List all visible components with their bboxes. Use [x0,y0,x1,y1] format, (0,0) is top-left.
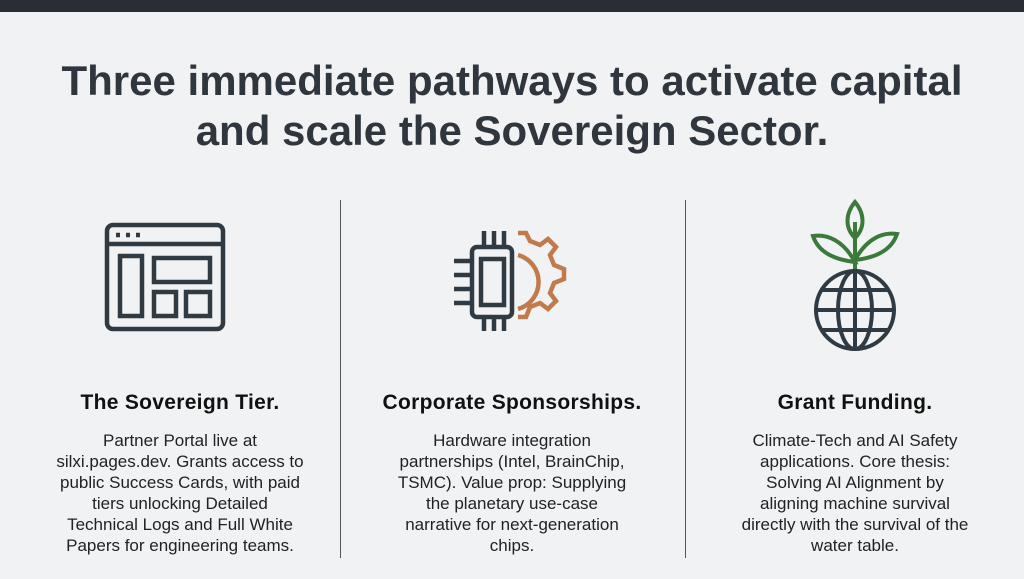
column: corporate sponsorships: narrative for next-generation [405,515,619,534]
column: corporate sponsorships: Corporate Sponsorships. [383,391,641,414]
column: corporate sponsorships: chips. [490,536,534,555]
column: grant funding: Climate-Tech and AI Safety [752,431,958,450]
column: sovereign tier: The Sovereign Tier. [80,391,280,414]
column: corporate sponsorships: partnerships (Intel, BrainChip, [400,452,624,471]
column: grant funding: applications. Core thesis: [760,452,950,471]
icon: chip and gear [454,230,566,331]
column: corporate sponsorships: TSMC). Value prop: Supplying [398,473,626,492]
column: grant funding [742,391,968,555]
column: sovereign tier: silxi.pages.dev. Grants access to [56,452,304,471]
column: sovereign tier: Technical Logs and Full White [67,515,293,534]
column: sovereign tier: public Success Cards, with paid [60,473,300,492]
column: sovereign tier: tiers unlocking Detailed [92,494,268,513]
title [62,57,962,154]
column: corporate sponsorships: Hardware integration [433,431,591,450]
icon: portal window [104,222,226,332]
column: sovereign tier [56,391,304,555]
column: sovereign tier: Partner Portal live at [103,431,257,450]
title: Three immediate pathways to activate capital [62,57,962,104]
column: grant funding: Grant Funding. [778,391,932,414]
column: corporate sponsorships [383,391,641,555]
icon: globe with sprout [810,199,900,351]
title: and scale the Sovereign Sector. [196,107,828,154]
column: corporate sponsorships: the planetary use-case [426,494,598,513]
column: sovereign tier: Papers for engineering teams. [66,536,294,555]
column: grant funding: Solving AI Alignment by [766,473,944,492]
column: grant funding: water table. [811,536,899,555]
column: grant funding: aligning machine survival [760,494,950,513]
column: grant funding: directly with the survival of the [742,515,968,534]
